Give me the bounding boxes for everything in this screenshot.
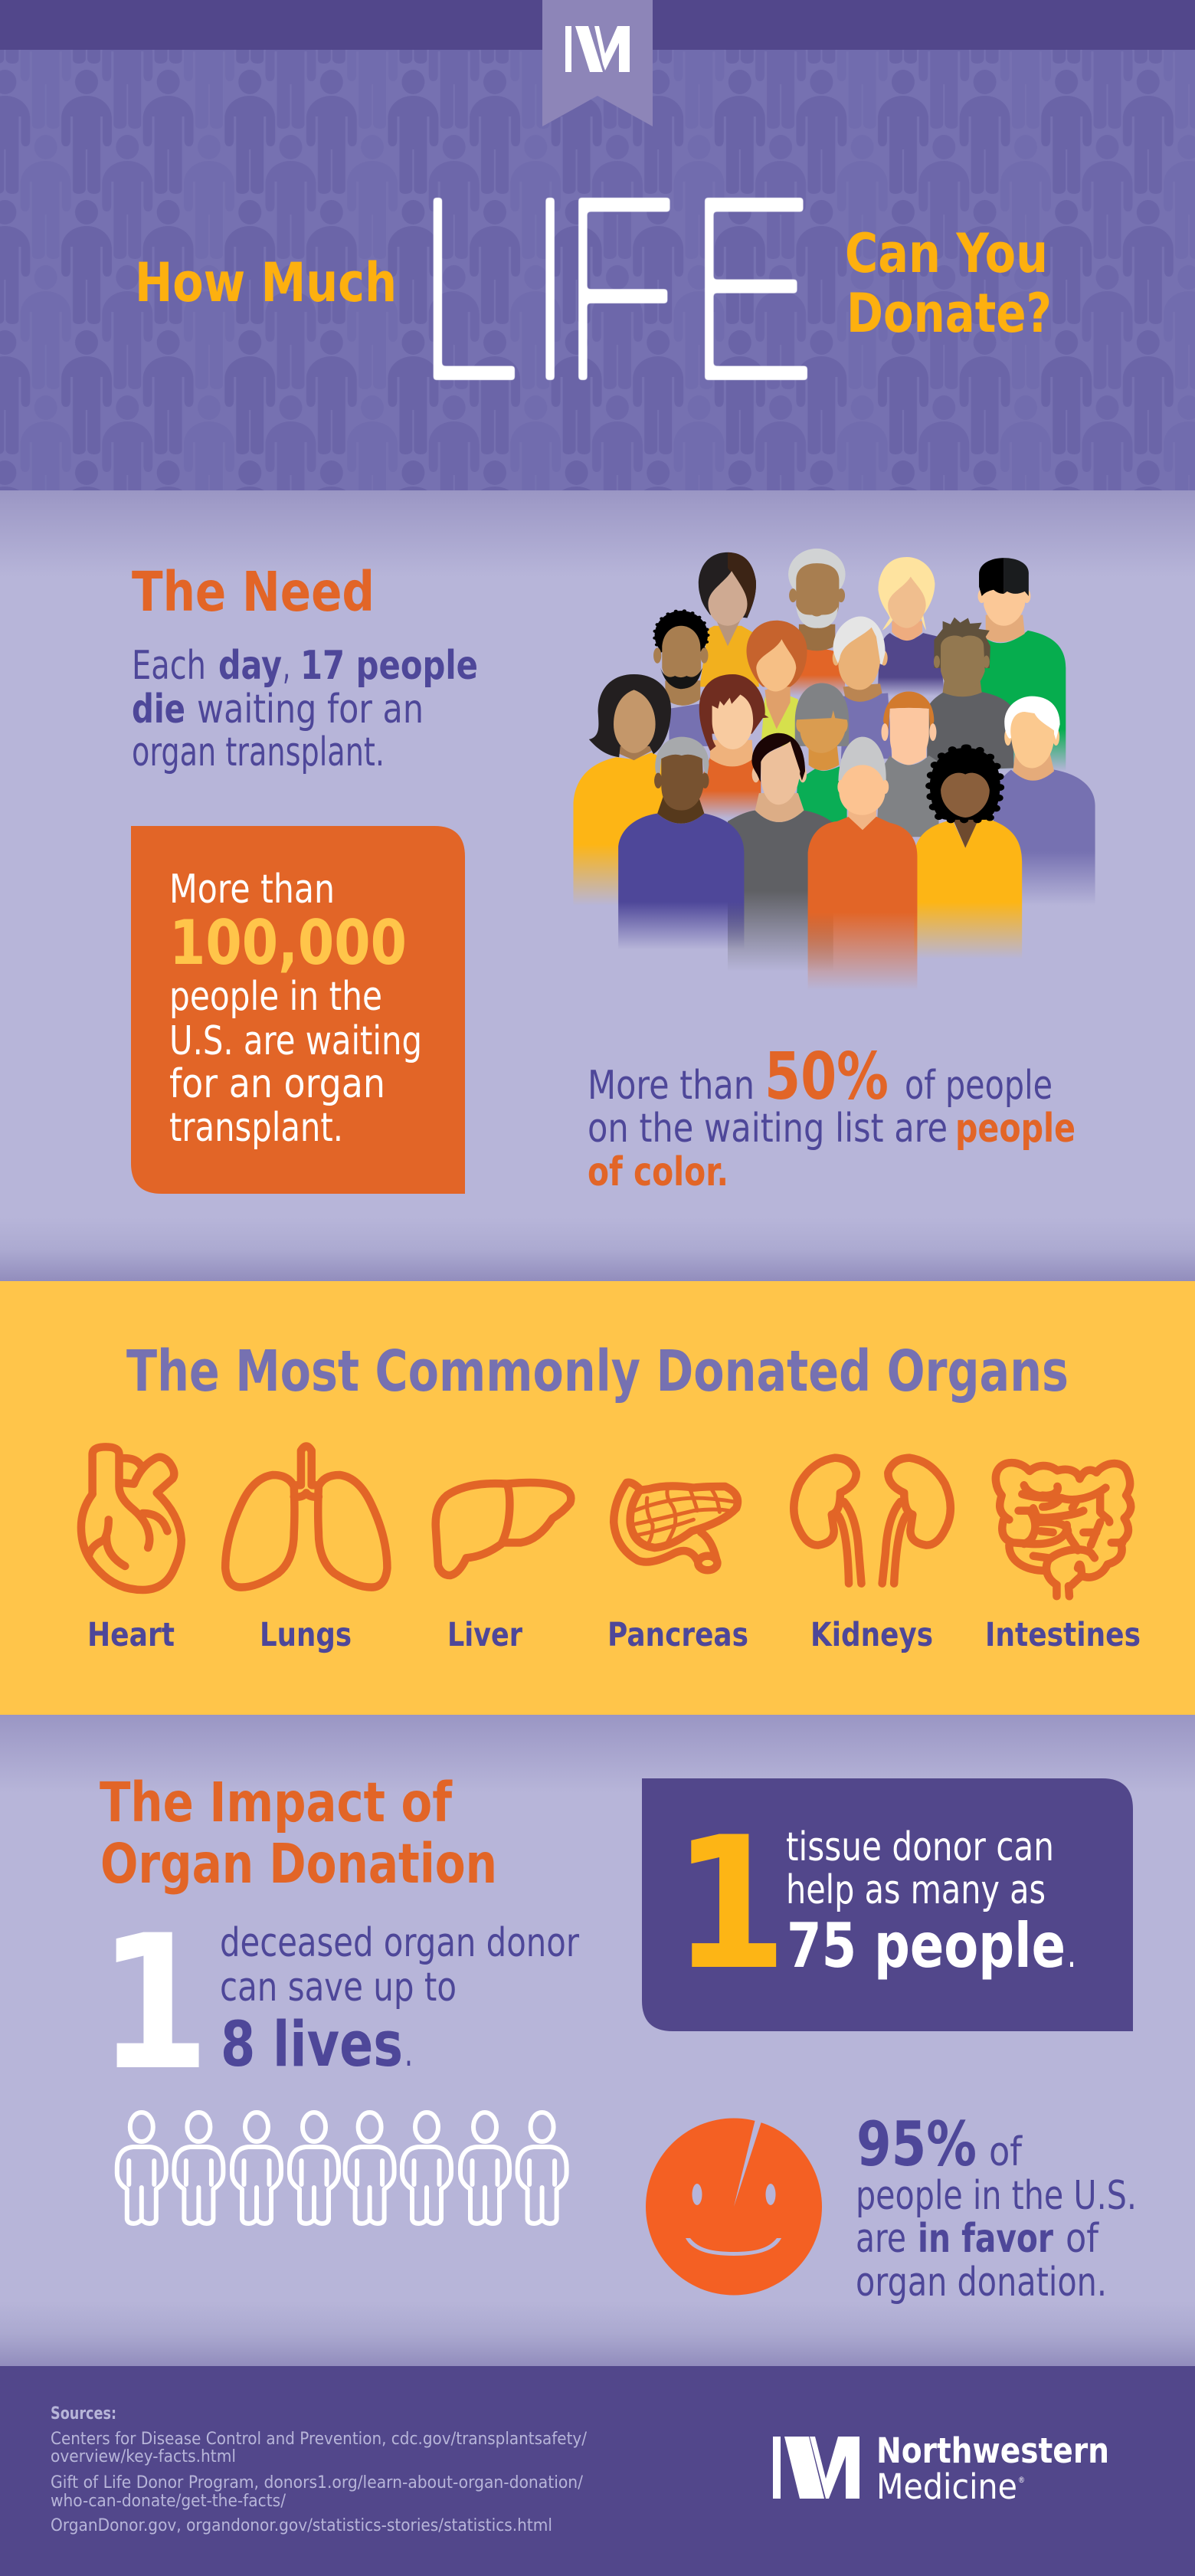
text: sources: Sources:	[51, 2404, 116, 2424]
icon: smiley pie chart 95 percent	[646, 2118, 822, 2296]
person: woman brown hair orange shirt	[699, 674, 769, 818]
icon: kidneys	[794, 1458, 951, 1584]
text: more than 50% people of color: on the waiting list are	[588, 1106, 948, 1152]
stat: 1 deceased donor saves 8 lives: deceased organ donor	[220, 1920, 579, 1966]
text: 95% of people in favor: of	[1066, 2216, 1099, 2262]
illustration: crowd of diverse people	[573, 549, 1095, 990]
text: each day 17 people die: waiting for an	[197, 687, 424, 732]
text: sources: Gift of Life Donor Program, donors1.org/learn-about-organ-donation/	[51, 2473, 584, 2492]
text: each day 17 people die: organ transplant.	[132, 729, 385, 775]
text: sources	[51, 2404, 588, 2535]
callout: 100,000 people waiting: people in the	[169, 974, 382, 1020]
panel: header background	[0, 0, 1195, 490]
person: man white hair and beard	[788, 549, 846, 696]
callout: 1 tissue donor 75 people: tissue donor can	[786, 1824, 1054, 1870]
labels: organ names: Heart	[87, 1616, 175, 1654]
person: red-haired woman	[746, 621, 807, 746]
person: man black hair green shirt	[978, 558, 1066, 772]
logo: Northwestern Medicine: Northwestern	[876, 2430, 1109, 2471]
callout: 100,000 people waiting: for an organ	[169, 1061, 385, 1107]
title: Can You: Can You	[845, 222, 1048, 285]
text: more than 50% people of color: More than	[588, 1063, 755, 1109]
text: each day 17 people die: day	[218, 643, 282, 689]
text: 95% of people in favor	[856, 2109, 1137, 2306]
person: person dark hair gray shirt	[728, 733, 833, 972]
icon: lungs	[225, 1446, 387, 1588]
text: sources: overview/key-facts.html	[51, 2447, 236, 2466]
text: more than 50% people of color	[588, 1039, 1076, 1195]
labels: organ names: Kidneys	[810, 1616, 933, 1654]
panel: most commonly donated organs	[0, 1281, 1195, 1715]
text: more than 50% people of color: of color.	[588, 1149, 728, 1195]
heading: impact: The Impact of	[100, 1771, 453, 1834]
icon: heart	[81, 1447, 182, 1590]
person: man spiky brown hair	[927, 618, 1013, 772]
callout: 1 tissue donor 75 people: .	[1067, 1931, 1076, 1977]
icon: pancreas	[614, 1483, 738, 1570]
text: each day 17 people die: Each	[132, 643, 206, 689]
text: each day 17 people die	[132, 643, 478, 775]
person: man white hair purple shirt	[994, 696, 1095, 906]
labels: organ names: Liver	[447, 1616, 523, 1654]
text: 95% of people in favor: are	[856, 2216, 906, 2262]
callout: 1 tissue donor 75 people: 1	[673, 1798, 787, 2011]
title: Donate?: Donate?	[846, 282, 1052, 345]
panel: footer	[0, 2366, 1195, 2576]
person: older person white hair	[833, 617, 892, 759]
title: LIFE: LIFE	[411, 134, 822, 442]
text: each day 17 people die: ,	[283, 643, 290, 689]
icon: intestines	[996, 1463, 1131, 1596]
person: woman dark hair	[699, 552, 759, 687]
stat: 1 deceased donor saves 8 lives: 8 lives	[221, 2009, 403, 2081]
person: woman gray hair bangs	[795, 683, 849, 823]
text: 95% of people in favor: in favor	[918, 2216, 1053, 2262]
labels: organ names: Pancreas	[607, 1616, 748, 1654]
heading: impact: Organ Donation	[100, 1832, 497, 1896]
text: 95% of people in favor: 95%	[856, 2109, 977, 2180]
person: woman curly black hair yellow shirt	[914, 748, 1022, 959]
title: How Much: How Much	[135, 251, 397, 314]
text: 95% of people in favor: organ donation.	[856, 2260, 1107, 2306]
text: sources: OrganDonor.gov, organdonor.gov/statistics-stories/statistics.html	[51, 2516, 552, 2535]
logo: Northwestern Medicine: Medicine	[876, 2466, 1017, 2507]
text: each day 17 people die: 17 people	[300, 643, 478, 689]
labels: organ names	[87, 1616, 1141, 1654]
person: man gray hair purple shirt	[618, 737, 744, 949]
icon: eight person outlines	[117, 2112, 567, 2224]
callout: 100,000 people waiting: More than	[169, 867, 335, 913]
stat: 1 deceased donor saves 8 lives: can save up to	[220, 1965, 457, 2011]
text: more than 50% people of color: 50%	[764, 1039, 889, 1115]
callout: 100,000 people waiting: 100,000	[169, 907, 407, 978]
panel: impact of organ donation	[0, 1715, 1195, 2366]
labels: organ names: Intestines	[985, 1616, 1141, 1654]
icon: logo ribbon	[542, 0, 653, 126]
callout: 100,000 people waiting: U.S. are waiting	[169, 1018, 422, 1064]
stat: 1 deceased donor saves 8 lives: .	[404, 2030, 413, 2076]
person: woman long dark hair yellow shirt	[573, 674, 671, 906]
stat: 1 deceased donor saves 8 lives	[98, 1896, 579, 2112]
heading: impact	[100, 1771, 497, 1896]
logo: Northwestern Medicine: ®	[1018, 2475, 1025, 2485]
icon: liver	[436, 1483, 571, 1575]
person: man orange hair	[876, 691, 939, 837]
text: sources: who-can-donate/get-the-facts/	[51, 2492, 286, 2511]
labels: organ names: Lungs	[260, 1616, 352, 1654]
panel: the need	[0, 490, 1195, 1281]
text: each day 17 people die: die	[132, 687, 185, 732]
heading: The Need: The Need	[132, 560, 375, 624]
title	[135, 134, 1052, 442]
text: sources: Centers for Disease Control and Prevention, cdc.gov/transplantsafety/	[51, 2430, 588, 2449]
callout: 100,000 people waiting: transplant.	[169, 1105, 343, 1151]
callout: 1 tissue donor 75 people: 75 people	[787, 1910, 1066, 1981]
callout: 1 tissue donor 75 people	[642, 1778, 1133, 2031]
person: man black curly hair and beard	[653, 611, 708, 746]
person: blonde woman	[877, 557, 945, 696]
callout: 1 tissue donor 75 people: help as many as	[786, 1867, 1046, 1913]
logo: Northwestern Medicine	[773, 2430, 1109, 2507]
callout: 100,000 people waiting	[131, 826, 465, 1194]
person: woman gray hair orange shirt	[808, 737, 917, 990]
stat: 1 deceased donor saves 8 lives: 1	[98, 1896, 210, 2112]
text: more than 50% people of color: people	[955, 1106, 1076, 1152]
text: more than 50% people of color: of people	[905, 1063, 1053, 1109]
text: 95% of people in favor: of	[989, 2129, 1023, 2175]
